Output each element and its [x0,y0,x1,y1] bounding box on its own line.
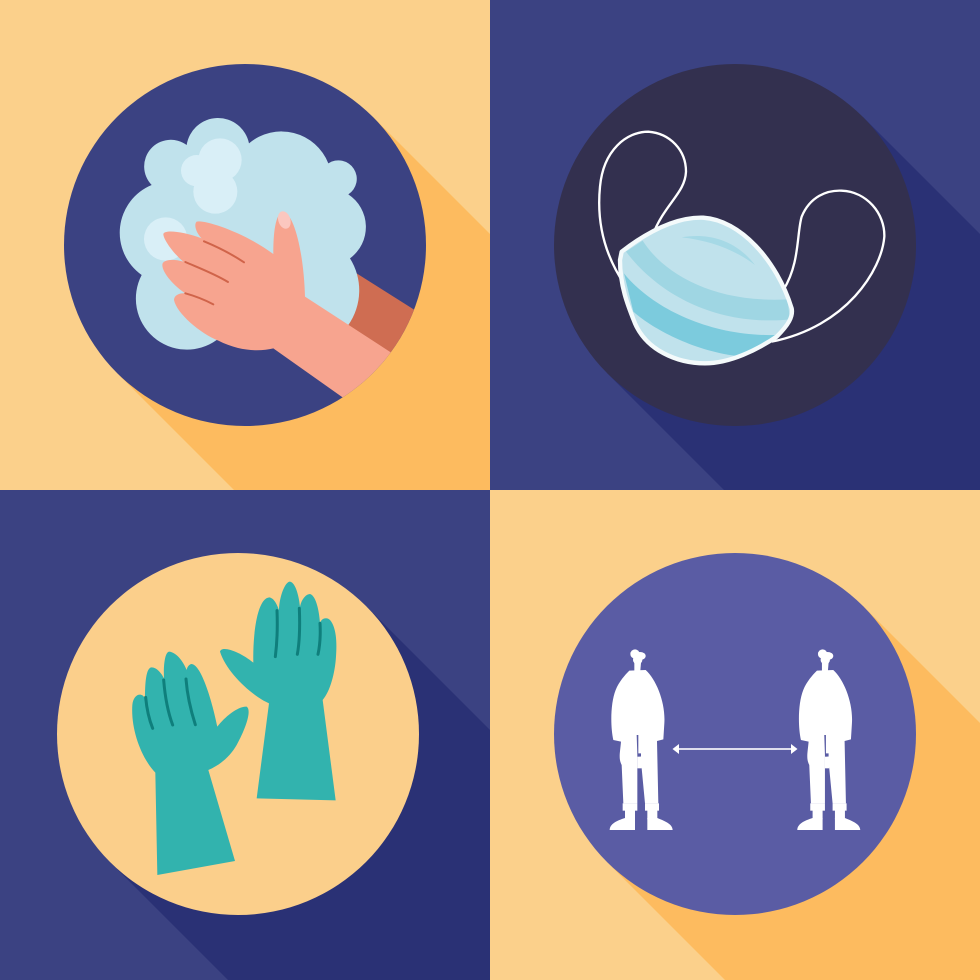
panel: hand washing [0,0,490,490]
soap foam cloud [120,118,366,350]
left glove [132,652,249,875]
long shadow: face mask [607,117,980,490]
long shadow: social distancing [607,606,980,980]
mask upper stripe [626,241,790,320]
icon: soapy hand [120,118,414,398]
icon: rubber gloves [132,582,336,875]
long shadow: hand washing [117,117,490,490]
mask body [620,218,792,363]
hand [162,216,390,398]
figure: right person [797,649,860,830]
panel: social distancing [490,490,980,980]
finger creases [185,241,244,304]
mask outline [620,218,792,363]
circle: gloves [57,553,419,915]
figure: left person [610,649,673,830]
mask fold highlight [682,236,755,265]
circle: hand washing [64,64,426,426]
sleeve [348,273,414,358]
icon: surgical mask [599,132,884,363]
foam highlights [144,138,242,261]
circle: social distancing [554,553,916,915]
panel: gloves [0,490,490,980]
mask lower stripe [624,273,775,356]
panel: face mask [490,0,980,490]
circle: face mask [554,64,916,426]
thumbnail [278,211,291,229]
long shadow: gloves [110,606,490,980]
arrow: two-way distance [672,744,798,754]
ear loops [599,132,884,342]
right glove [220,582,336,800]
